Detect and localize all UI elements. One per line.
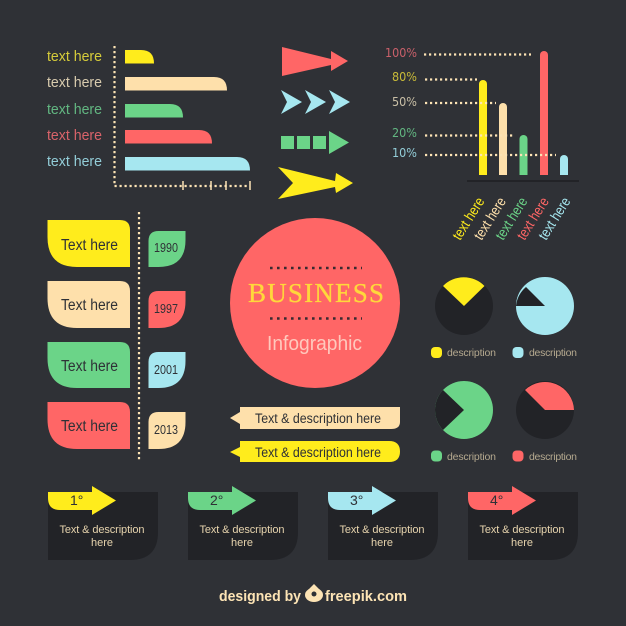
step card 2: Text & description (200, 524, 284, 536)
percent labels: 100% (385, 46, 417, 60)
percent labels (385, 46, 417, 160)
callouts: Text here (61, 297, 118, 314)
step card 2: here (231, 537, 253, 549)
horizontal bar chart (47, 46, 250, 190)
arrow: red wedge (282, 47, 348, 76)
percent labels: 10% (392, 146, 417, 160)
callouts: Text here (61, 237, 118, 254)
year leaves: 2001 (154, 362, 178, 377)
percent labels: 80% (392, 70, 417, 84)
rotated labels: text here (514, 195, 553, 243)
pie legends: description (529, 451, 577, 463)
subtitle: infographic: Infographic (267, 333, 362, 355)
pie: green (435, 381, 493, 439)
title: business: BUSINESS (248, 278, 384, 308)
bar labels: text here (47, 102, 102, 118)
step card 3: here (371, 537, 393, 549)
percent labels: 50% (392, 95, 417, 109)
year leaves: 1997 (154, 301, 178, 316)
step card 1: Text & description (60, 524, 144, 536)
bar labels: text here (47, 49, 102, 65)
step card 1: here (91, 537, 113, 549)
banner: cream: Text & description here (255, 411, 381, 426)
footer credit (219, 584, 407, 605)
column chart (385, 46, 579, 243)
year leaves: 1990 (154, 240, 178, 255)
step card 4: 4° (490, 492, 503, 508)
bars (125, 50, 250, 170)
rotated labels: text here (536, 195, 574, 243)
rotated labels: text here (493, 195, 531, 243)
year leaves (148, 231, 186, 449)
bar labels: text here (47, 154, 102, 170)
arrow: green squares (281, 131, 349, 154)
step card 1 (48, 486, 158, 560)
footer credit: designed by (219, 589, 301, 605)
footer credit: freepik.com (325, 589, 407, 605)
step card 3 (328, 486, 438, 560)
icon: freepik logo (305, 584, 323, 602)
pie legends: description (447, 347, 496, 359)
columns (479, 51, 568, 175)
pie legends (431, 347, 577, 463)
pie legends: description (529, 347, 577, 359)
banner: cream (230, 407, 400, 429)
step card 2 (188, 486, 298, 560)
rotated labels: text here (471, 195, 510, 243)
year leaves: 2013 (154, 422, 178, 437)
step card 4: here (511, 537, 533, 549)
title badge (230, 218, 400, 388)
rotated labels (450, 195, 574, 243)
callouts: Text here (61, 358, 118, 375)
rotated labels: text here (450, 195, 488, 243)
callouts: Text here (61, 418, 118, 435)
step card 4: Text & description (480, 524, 564, 536)
bar labels (47, 49, 102, 170)
step card 3: Text & description (340, 524, 424, 536)
banner: yellow: Text & description here (255, 445, 381, 460)
pie: blue (516, 277, 574, 335)
pie: yellow (435, 277, 493, 335)
timeline (48, 212, 186, 462)
step card 3: 3° (350, 492, 363, 508)
bar labels: text here (47, 128, 102, 144)
step card 4 (468, 486, 578, 560)
step card 2: 2° (210, 492, 223, 508)
pie: red (516, 381, 574, 439)
percent labels: 20% (392, 126, 417, 140)
callouts (48, 220, 130, 449)
pie legends: description (447, 451, 496, 463)
bar labels: text here (47, 75, 102, 91)
arrow: blue chevrons (281, 90, 350, 114)
step card 1: 1° (70, 492, 83, 508)
arrow: yellow dart (278, 167, 353, 199)
banner: yellow (230, 441, 400, 462)
